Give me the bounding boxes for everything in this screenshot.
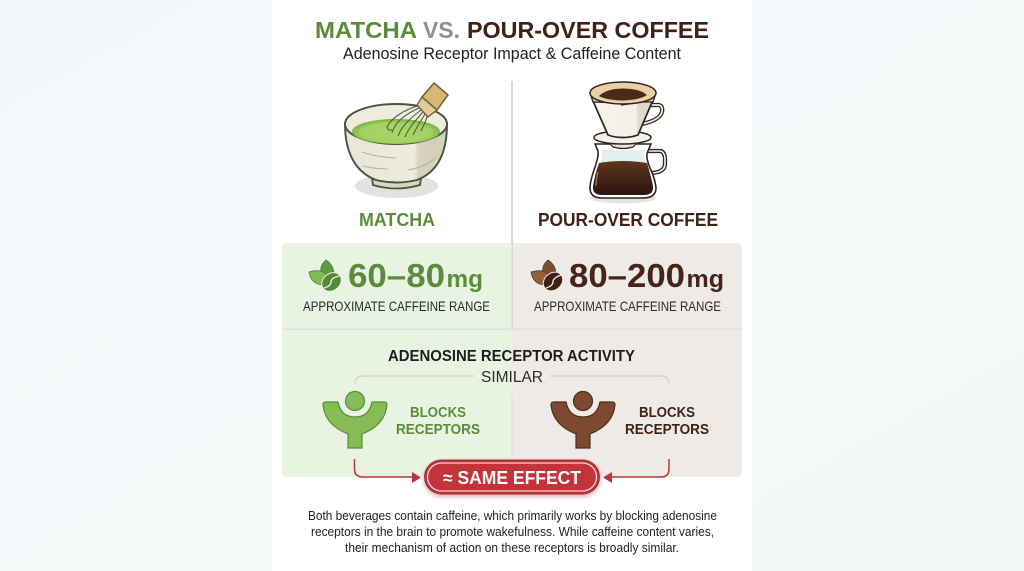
stat: coffee caffeine: mg [686,266,724,293]
dripper handle [642,105,662,124]
dripper cone [593,100,653,138]
text block: explanation [308,508,717,555]
main card [272,0,752,571]
saucer [608,142,638,148]
label: similar: SIMILAR [481,369,543,386]
label: green blocks receptors: RECEPTORS [396,422,480,438]
icon: green leaves and bean [309,260,345,295]
bracket [355,376,669,384]
panel: coffee background [512,243,742,477]
text block: explanation: receptors in the brain to promote wakefulness. While caffeine content varies, [311,524,714,539]
title: MATCHA [315,17,417,43]
stat: matcha caffeine: 60–80 [348,257,445,294]
carafe body [590,144,656,198]
label: brown blocks receptors: RECEPTORS [625,422,709,438]
arrow: left to same effect [354,459,421,483]
title [315,17,709,43]
stat: coffee caffeine: 80–200 [569,257,685,294]
text block: explanation: their mechanism of action on these receptors is broadly similar. [345,540,679,555]
label: brown blocks receptors [625,405,709,438]
whisk [387,83,448,137]
label: green blocks receptors [396,405,480,438]
arrow: right to same effect [603,459,669,483]
panel: matcha background [282,243,512,477]
icon: green receptor [323,392,387,448]
title: POUR-OVER COFFEE [467,17,709,43]
caption: matcha caffeine: APPROXIMATE CAFFEINE RANGE [303,298,490,314]
icon: brown receptor [551,392,615,448]
heading: adenosine receptor activity: ADENOSINE RECEPTOR ACTIVITY [388,348,636,365]
label: green blocks receptors: BLOCKS [410,405,466,421]
label: matcha: MATCHA [359,210,435,230]
icon: brown leaves and bean [531,260,567,295]
caption: coffee caffeine: APPROXIMATE CAFFEINE RANGE [534,298,721,314]
label: pour-over coffee: POUR-OVER COFFEE [538,210,718,230]
stat: matcha caffeine [348,257,483,294]
filter and grounds [591,96,655,105]
badge: same effect [424,460,600,494]
icon: pour-over dripper and carafe [590,82,665,204]
text block: explanation: Both beverages contain caffeine, which primarily works by blocking adenosine [308,508,717,523]
stat: matcha caffeine: mg [446,266,483,293]
subtitle: Adenosine Receptor Impact & Caffeine Content [343,45,681,63]
badge: same effect: ≈ SAME EFFECT [443,468,581,488]
carafe handle [647,151,665,173]
icon: matcha bowl with whisk [345,83,448,198]
title: VS. [423,17,460,43]
label: brown blocks receptors: BLOCKS [639,405,695,421]
